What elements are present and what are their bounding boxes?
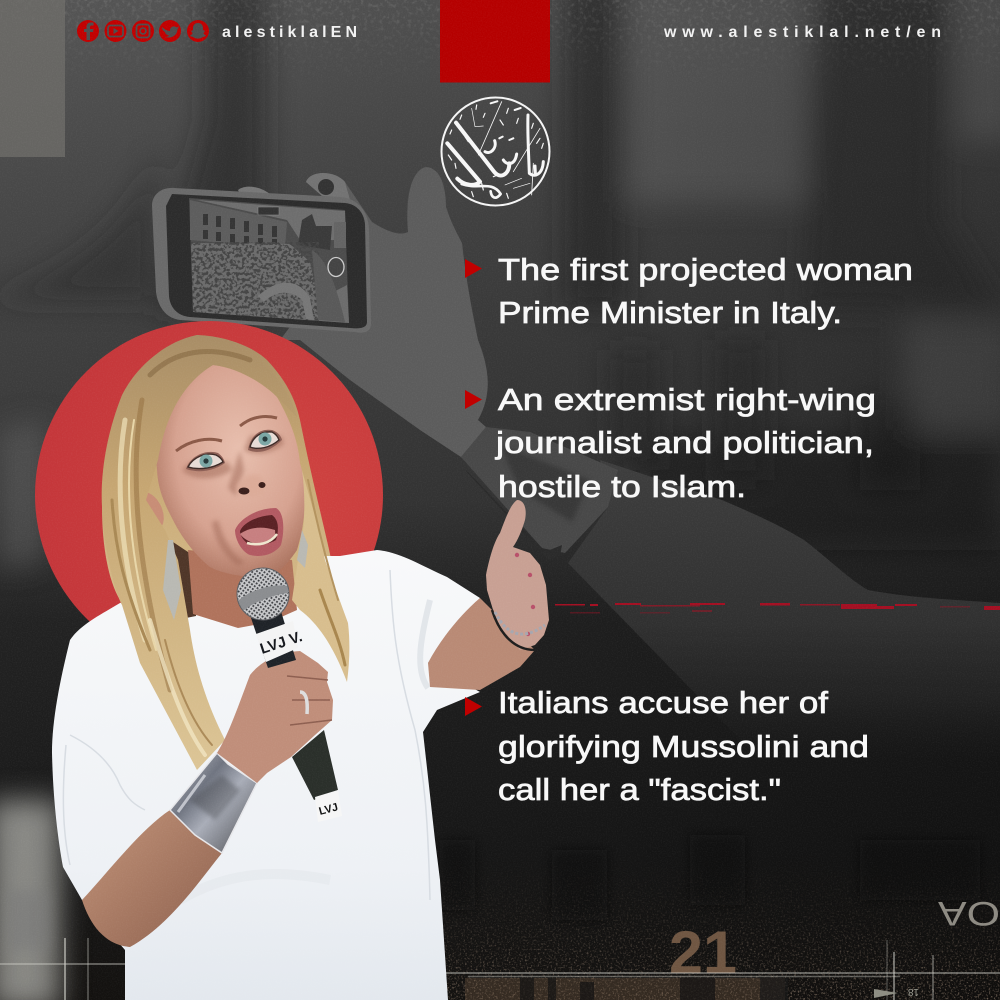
right eye and brow bbox=[240, 416, 282, 452]
earrings bbox=[163, 530, 308, 620]
shadow behind neck bbox=[170, 540, 200, 620]
outstretched hand bbox=[486, 500, 549, 650]
upside-down stencil letters: OA bbox=[938, 894, 1000, 932]
background grey arm bbox=[568, 460, 1000, 760]
microphone head bbox=[237, 568, 304, 668]
woman speaking with microphone bbox=[52, 335, 549, 1000]
microphone handle: LVJ bbox=[318, 801, 339, 818]
hair back bbox=[102, 335, 348, 680]
ruler mark: 18 bbox=[907, 986, 919, 997]
bullet: extremist right-wing: hostile to Islam. bbox=[498, 469, 746, 504]
background grey hand holding phone bbox=[238, 167, 488, 457]
face bbox=[156, 365, 305, 577]
fist holding the microphone bbox=[217, 651, 333, 783]
top red tab bbox=[440, 0, 550, 82]
bullet: accused of glorifying Mussolini: call her a "fascist." bbox=[498, 772, 781, 807]
metal cuff bracelet bbox=[170, 753, 257, 853]
ruler mark bbox=[874, 986, 919, 998]
bullet: extremist right-wing: journalist and politician, bbox=[495, 425, 874, 460]
left eye and brow bbox=[176, 439, 225, 471]
bullet: first projected woman: The first projected woman bbox=[498, 252, 913, 287]
wristband bbox=[461, 427, 618, 560]
phone screen: rally photo bbox=[189, 198, 349, 324]
smartphone bbox=[152, 188, 371, 333]
red torn strip bbox=[555, 603, 1000, 614]
red circle bbox=[35, 321, 383, 669]
bullet: extremist right-wing: An extremist right-wing bbox=[498, 382, 876, 417]
bullet: extremist right-wing bbox=[465, 382, 876, 504]
bullet: first projected woman bbox=[465, 252, 913, 330]
calligraphic logo bbox=[442, 98, 550, 206]
ear bbox=[131, 488, 169, 534]
bullet: first projected woman: Prime Minister in Italy. bbox=[498, 295, 842, 330]
mouth bbox=[235, 508, 283, 556]
shirt folds bbox=[63, 570, 430, 900]
facial shading bbox=[182, 436, 284, 566]
social handle: alestiklalEN bbox=[222, 24, 357, 41]
hair front strands bbox=[102, 335, 349, 770]
bullet: accused of glorifying Mussolini bbox=[465, 685, 869, 807]
rust texture at bottom bbox=[442, 878, 1000, 1000]
crop marks and rules bbox=[0, 938, 1000, 1000]
stencil number 21: 21 bbox=[669, 919, 737, 986]
shirt bbox=[52, 550, 480, 1000]
website url: www.alestiklal.net/en bbox=[663, 24, 941, 41]
social icons bbox=[77, 20, 209, 42]
forearm raised arm bbox=[428, 598, 535, 690]
microphone head: LVJ V. bbox=[258, 628, 304, 658]
bullet: accused of glorifying Mussolini: Italians accuse her of bbox=[498, 685, 828, 720]
bullet: accused of glorifying Mussolini: glorifying Mussolini and bbox=[498, 729, 869, 764]
nose bbox=[236, 475, 266, 497]
neck bbox=[188, 550, 297, 628]
raised left forearm bbox=[82, 810, 222, 947]
microphone handle bbox=[292, 730, 342, 822]
